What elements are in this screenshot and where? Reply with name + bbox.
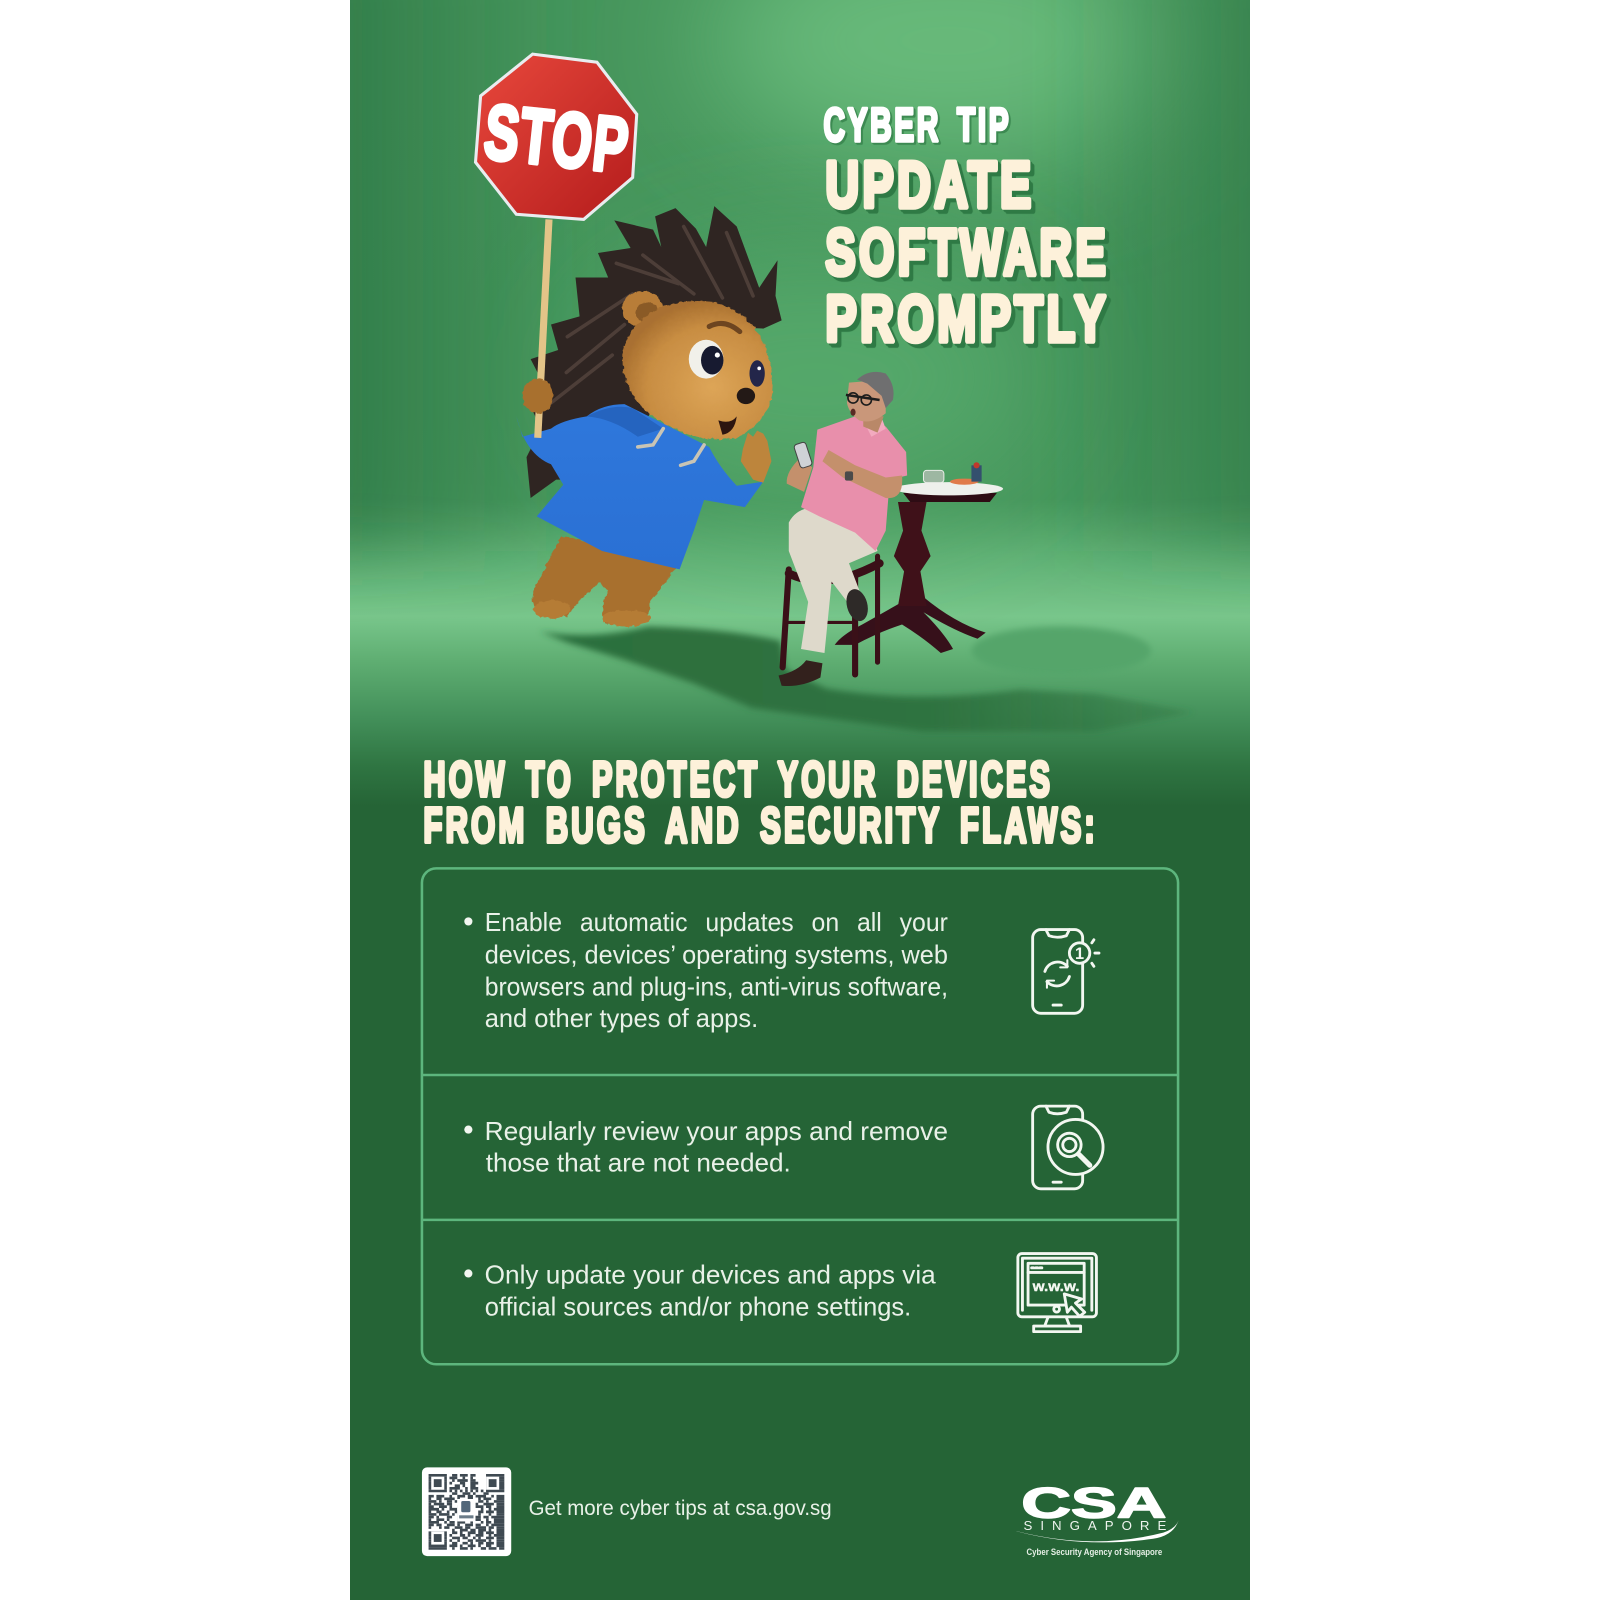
tip 1 text: browsers and plug-ins, anti-virus software,: [485, 973, 948, 1001]
illustration: chair: [783, 556, 880, 674]
icon: monitor with www browser: w.w.w.: [1032, 1279, 1080, 1294]
heading: how to protect your devices: [423, 753, 1098, 853]
heading: how to protect your devices: HOW TO PROTECT YOUR DEVICES: [423, 753, 1053, 807]
tip 2 text: Regularly review your apps and remove: [485, 1118, 948, 1146]
title: update software promptly: SOFTWARE: [826, 215, 1109, 288]
ear: [622, 291, 663, 328]
icon: phone with update refresh: [1033, 930, 1099, 1013]
icon: stop sign: STOP: [480, 89, 634, 190]
illustration: table with tableware: [835, 462, 1003, 653]
hoodie: [516, 404, 763, 569]
tip 3 text: official sources and/or phone settings.: [485, 1293, 911, 1321]
eye right: [749, 360, 765, 387]
raised hand: [741, 431, 771, 483]
title: cyber tip: CYBER TIP: [823, 99, 1011, 151]
tip 2 text: those that are not needed.: [486, 1149, 791, 1177]
title: update software promptly: [826, 148, 1109, 355]
panel: tips card: [422, 868, 1178, 1364]
icon: monitor with www browser: [1018, 1254, 1096, 1332]
illustration: man with phone: [779, 372, 907, 686]
footer text: Get more cyber tips at csa.gov.sg: [529, 1497, 832, 1520]
nose: [737, 388, 755, 404]
heading: how to protect your devices: FROM BUGS AND SECURITY FLAWS:: [423, 799, 1098, 853]
legs and feet: [533, 536, 679, 627]
quill highlights: [547, 227, 753, 454]
tip 1 text: Enable automatic updates on all your: [485, 909, 948, 937]
hood shade: [587, 407, 663, 437]
mouth: [718, 416, 737, 435]
tip 1 text: and other types of apps.: [485, 1005, 758, 1033]
logo: CSA Singapore: Cyber Security Agency of Singapore: [1027, 1547, 1162, 1557]
panel: poster background: [350, 0, 1250, 1600]
shadow: characters on floor: [540, 627, 1194, 732]
head: [622, 301, 773, 439]
eyebrow: [709, 323, 740, 332]
quills: [524, 206, 782, 498]
icon: phone with update refresh: 1: [1075, 945, 1084, 963]
eye left: [689, 340, 723, 379]
illustration: hedgehog mascot: [516, 206, 782, 627]
title: update software promptly: UPDATE: [826, 148, 1035, 221]
tip 3 text: Only update your devices and apps via: [485, 1262, 937, 1290]
logo: CSA Singapore: [1014, 1479, 1179, 1557]
logo: CSA Singapore: SINGAPORE: [1023, 1518, 1166, 1533]
drawstrings: [638, 429, 704, 465]
icon: stop sign: [476, 54, 637, 438]
title: update software promptly: PROMPTLY: [826, 282, 1109, 355]
qr code: [422, 1467, 511, 1556]
icon: phone with magnifier: [1033, 1106, 1103, 1189]
tip 1 text: devices, devices’ operating systems, web: [485, 941, 948, 969]
tip 2 text: [464, 1118, 948, 1177]
tip 1 text: [464, 909, 948, 1033]
logo: CSA Singapore: CSA: [1021, 1479, 1166, 1527]
tip 3 text: [464, 1262, 937, 1321]
